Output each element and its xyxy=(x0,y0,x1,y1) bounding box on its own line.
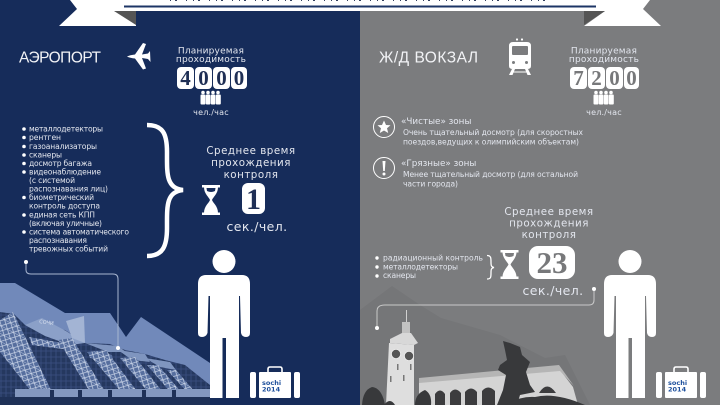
number: 4000 xyxy=(177,66,247,90)
icon: suitcase airport: 2014 xyxy=(262,386,281,394)
icon: suitcase station xyxy=(656,367,706,398)
text: per hour airport: чел./час xyxy=(193,108,229,117)
text: planned throughput station: Планируемая xyxy=(571,46,637,56)
list: station security xyxy=(375,254,484,280)
number: 23 seconds: 23 xyxy=(536,245,568,280)
airport photo: СОЧИ xyxy=(39,319,54,327)
number: 4000: 0 xyxy=(198,66,209,90)
text: average control time airport: прохождения xyxy=(211,157,291,169)
icon: person airport xyxy=(198,250,250,398)
list: airport security: распознавания xyxy=(29,236,87,245)
text: dirty zones: Менее тщательный досмотр (для остальной xyxy=(403,170,578,179)
number: 1 second xyxy=(242,183,265,216)
text: clean zones: Очень тщательный досмотр (для скоростных xyxy=(403,128,584,137)
text: clean zones: поездов,ведущих к олимпийским объектам) xyxy=(403,138,579,146)
brace: station xyxy=(487,256,494,279)
text: average control time airport: Среднее время xyxy=(206,145,296,157)
list: airport security: распознавания лиц) xyxy=(29,184,108,194)
number: 4000: 0 xyxy=(234,66,244,90)
icon: group of people station xyxy=(594,91,614,104)
text: clean zones: «Чистые» зоны xyxy=(401,117,471,127)
text: planned throughput airport xyxy=(176,46,246,65)
text: average control time station: контроля xyxy=(522,229,576,241)
text: average control time airport: контроля xyxy=(224,169,278,181)
icon: person station xyxy=(604,250,656,398)
number: 4000: 4 xyxy=(180,66,191,90)
panel: railway station background xyxy=(360,0,720,405)
list: airport security: биометрический xyxy=(29,193,94,202)
icon: group of people airport xyxy=(200,91,221,104)
list: airport security: единая сеть КПП xyxy=(29,210,95,220)
station connector line xyxy=(375,287,596,330)
icon: hourglass airport xyxy=(202,185,220,215)
list: airport security: тревожных событий xyxy=(29,244,108,254)
number: 23 seconds xyxy=(529,245,575,280)
text: dirty zones xyxy=(401,159,578,188)
icon: suitcase station: sochi xyxy=(668,379,687,387)
station background mountains xyxy=(360,286,590,405)
list: station security: радиационный контроль xyxy=(383,254,484,262)
text: planned throughput airport: Планируемая xyxy=(178,46,244,56)
number: 7200: 0 xyxy=(609,66,620,90)
list: station security: сканеры xyxy=(383,271,416,280)
list: airport security: рентген xyxy=(29,133,61,142)
airport photo xyxy=(0,283,210,405)
list: airport security: металлодетекторы xyxy=(29,124,103,134)
text: dirty zones: «Грязные» зоны xyxy=(401,159,476,169)
list: airport security: контроль доступа xyxy=(29,202,100,210)
text: sec per person station: сек./чел. xyxy=(523,283,583,298)
number: 7200: 2 xyxy=(591,66,602,90)
panel: airport background xyxy=(0,0,360,405)
text: clean zones xyxy=(401,117,584,146)
station building xyxy=(419,365,578,405)
text: per hour station: чел./час xyxy=(586,108,622,117)
text: average control time station xyxy=(504,206,594,241)
airport connector line xyxy=(24,260,120,350)
list: airport security: система автоматического xyxy=(29,228,129,236)
trees xyxy=(362,341,585,405)
icon: star in circle xyxy=(374,116,394,138)
icon: exclamation in circle xyxy=(374,158,394,178)
number: 7200: 7 xyxy=(573,66,584,90)
text: planned throughput station: проходимость xyxy=(569,55,639,65)
text: sec per person airport: сек./чел. xyxy=(227,219,287,234)
text: average control time airport xyxy=(206,145,296,181)
text: average control time station: Среднее время xyxy=(504,206,594,218)
heading: railway station: Ж/Д ВОКЗАЛ xyxy=(379,50,478,66)
list: airport security xyxy=(22,124,129,254)
list: airport security: сканеры xyxy=(29,150,62,160)
icon: suitcase station: 2014 xyxy=(668,386,687,394)
clock tower xyxy=(386,310,418,405)
number: 7200: 0 xyxy=(626,66,637,90)
text: planned throughput station xyxy=(569,46,639,65)
list: airport security: досмотр багажа xyxy=(29,159,92,168)
list: airport security: видеонаблюдение xyxy=(29,168,101,176)
text: planned throughput airport: проходимость xyxy=(176,55,246,65)
number: 4000: 0 xyxy=(216,66,227,90)
station photo xyxy=(362,310,585,405)
brace: airport xyxy=(147,125,183,256)
icon: train xyxy=(509,38,531,75)
list: station security: металлодетекторы xyxy=(383,262,458,272)
text: dirty zones: части города) xyxy=(403,180,458,188)
icon: hourglass station xyxy=(500,250,518,279)
icon: suitcase airport: sochi xyxy=(262,379,281,387)
list: airport security: (включая уличные) xyxy=(29,219,102,228)
list: airport security: (с системой xyxy=(29,176,75,185)
number: 7200 xyxy=(570,66,639,90)
icon: suitcase airport xyxy=(250,367,300,398)
list: airport security: газоанализаторы xyxy=(29,142,97,151)
heading: airport: АЭРОПОРТ xyxy=(19,50,102,66)
title ribbon xyxy=(59,0,661,26)
icon: airplane xyxy=(127,43,150,70)
text: average control time station: прохождения xyxy=(509,218,589,230)
number: 1 second: 1 xyxy=(246,183,261,216)
terminal roofs xyxy=(0,312,195,400)
